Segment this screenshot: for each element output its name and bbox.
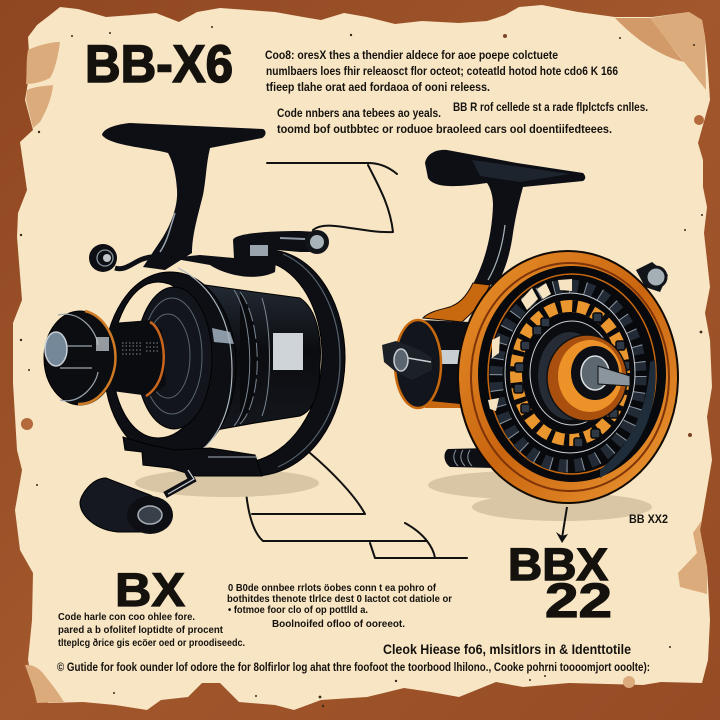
rear ring — [250, 250, 345, 476]
hub orange rings — [547, 335, 627, 421]
spokes — [496, 286, 640, 466]
orange neck — [423, 283, 490, 322]
roller highlight — [250, 245, 268, 256]
orange collars — [146, 322, 164, 396]
upper roller bar — [170, 231, 320, 277]
arrow to BBX 22 — [556, 507, 568, 543]
upper knob — [636, 262, 668, 292]
large label: BX: BX — [115, 563, 185, 616]
arm — [425, 150, 585, 285]
intro text block: Coo8: oresX thes a thendier aldece for aoe poepe colctuete — [265, 50, 558, 62]
crank — [165, 470, 192, 495]
front bolt — [382, 341, 432, 380]
reel shadows — [135, 469, 652, 521]
small label: BB XX2: BB XX2 — [629, 514, 668, 526]
large label: BBX 22 — [508, 539, 612, 628]
text block bottom left: pared a b ofolitef loptidte of procent — [58, 624, 223, 636]
bail arm and stem — [102, 123, 266, 270]
large label: BBX 22: 22 — [545, 575, 612, 628]
hub centre — [571, 346, 619, 400]
text block bottom left — [58, 611, 245, 649]
orange wheel rim — [458, 251, 678, 503]
ring highlight band — [212, 328, 234, 344]
text block bottom centre — [227, 582, 452, 630]
rim inner line — [471, 263, 669, 491]
secondary note left: toomd bof outbbtec or roduoe braoleed cars ool doentiifedteees. — [277, 124, 612, 136]
lower bar — [444, 448, 495, 468]
roller knob — [305, 230, 329, 254]
leader lines upper — [267, 163, 397, 232]
large label: BBX 22: BBX — [508, 539, 608, 590]
dial outer line — [505, 293, 635, 453]
leader lines lower — [245, 453, 467, 558]
spindle — [598, 366, 630, 386]
stem highlight — [160, 213, 175, 252]
cap centre — [45, 332, 67, 366]
rear ring highlights — [278, 254, 340, 467]
intro text block: tfieep tlahe orat aed fordaoa of ooni releess. — [266, 82, 490, 94]
intro text block — [265, 50, 618, 94]
blue crescent — [600, 360, 656, 478]
interior orange line — [488, 274, 656, 474]
text block bottom left: Code harle con coo ohlee fore. — [58, 611, 195, 623]
neck — [112, 320, 166, 396]
title: BB-X6: BB-X6 — [85, 35, 233, 94]
spool notch band — [240, 292, 257, 424]
front cap — [44, 311, 116, 405]
neck knurl — [122, 343, 158, 354]
illustration: orange reel — [382, 150, 678, 503]
illustration: black spinning reel — [44, 123, 345, 534]
secondary note right: BB R rof cellede st a rade flplctcfs cnlles. — [453, 102, 648, 114]
dial orange band — [516, 306, 624, 440]
arm highlight — [472, 160, 570, 182]
secondary note left — [277, 108, 612, 136]
foot highlight — [208, 456, 258, 458]
small curl lever — [89, 244, 152, 272]
caption right: Cleok Hiease fo6, mlsitlors in & Identtotile — [383, 642, 631, 657]
side cylinder — [418, 320, 470, 407]
cap highlight — [96, 337, 109, 351]
hub rings — [581, 356, 609, 390]
text block bottom centre: bothitdes thenote tlrlce dest 0 Iactot cot datiole or — [227, 593, 452, 605]
wheel windows — [488, 279, 572, 411]
inner disc — [136, 287, 212, 429]
text block bottom centre: • fotmoe foor clo of op pottlld a. — [228, 604, 368, 616]
text block bottom left: tlteplcg ðrice gis ecöer oed or proodiseedc. — [58, 637, 245, 649]
text block bottom centre: 0 B0de onnbee rrlots öobes conn t ea pohro of — [228, 582, 436, 594]
front ring frame — [104, 272, 236, 458]
black interior — [478, 266, 666, 482]
text block bottom centre: Boolnoifed ofloo of ooreeot. — [272, 618, 405, 630]
dial inner disc — [530, 321, 614, 425]
side drum — [395, 320, 441, 408]
spool body — [205, 285, 320, 432]
base foot — [123, 437, 262, 476]
secondary note left: Code nnbers ana tebees ao yeals. — [277, 108, 441, 120]
cylinder highlight — [440, 350, 468, 364]
intro text block: numlbaers loes fhir releaosct flor octeot; coteatld hotod hote cdo6 K 166 — [266, 66, 618, 78]
cap orange rim — [78, 311, 115, 404]
dial code squares — [514, 313, 630, 447]
handle grip — [80, 478, 173, 534]
spool highlight — [273, 333, 303, 370]
cap details — [58, 314, 98, 401]
